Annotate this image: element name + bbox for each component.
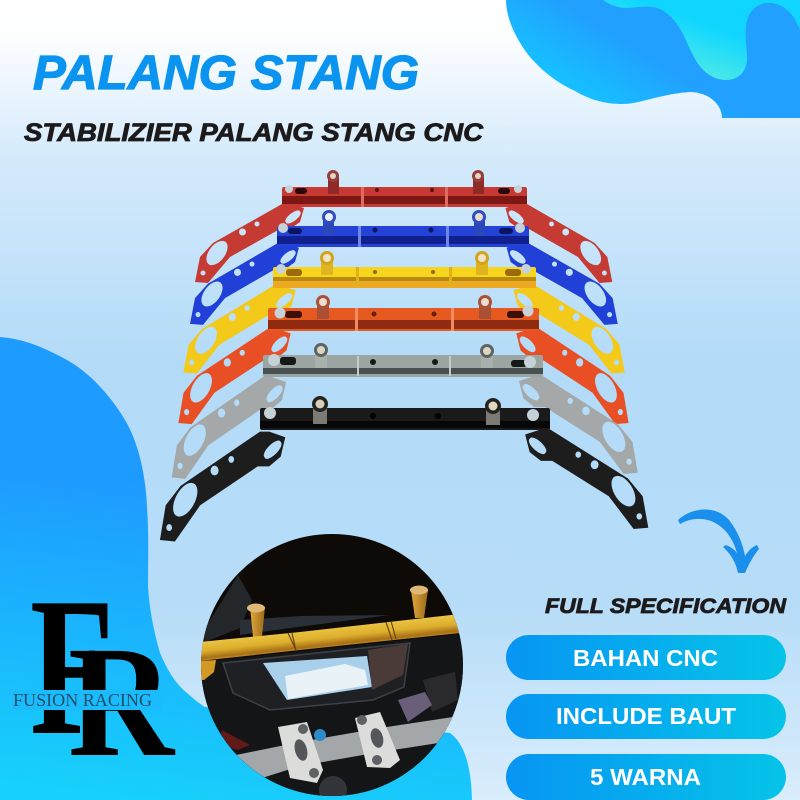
arrow [678,509,759,573]
product: six colour brackets [160,170,648,541]
title: PALANG STANG [33,47,419,100]
specification heading: FULL SPECIFICATION [545,595,787,618]
left bottom blob [0,337,472,800]
logo letter F: F [30,557,114,776]
spec pill: warna: 5 WARNA [590,764,701,790]
logo letter R: R [68,614,176,790]
spec pill: baut [506,694,786,739]
bracket: orange [178,295,629,424]
spec pill: warna [506,754,786,800]
spec pill: bahan [506,635,786,680]
bracket: grey [172,343,638,479]
bracket: yellow [183,251,625,374]
bracket: red [195,170,612,283]
spec pill: baut: INCLUDE BAUT [556,703,736,729]
top right blob [506,0,800,118]
spec pill: bahan: BAHAN CNC [573,645,718,671]
subtitle: STABILIZIER PALANG STANG CNC [24,119,484,147]
logo: Fusion Racing [12,557,176,790]
circular photo of installed bracket [195,530,470,800]
bracket: blue [190,210,618,325]
bracket: black [160,396,648,541]
logo wordmark: FUSION RACING [13,690,152,710]
